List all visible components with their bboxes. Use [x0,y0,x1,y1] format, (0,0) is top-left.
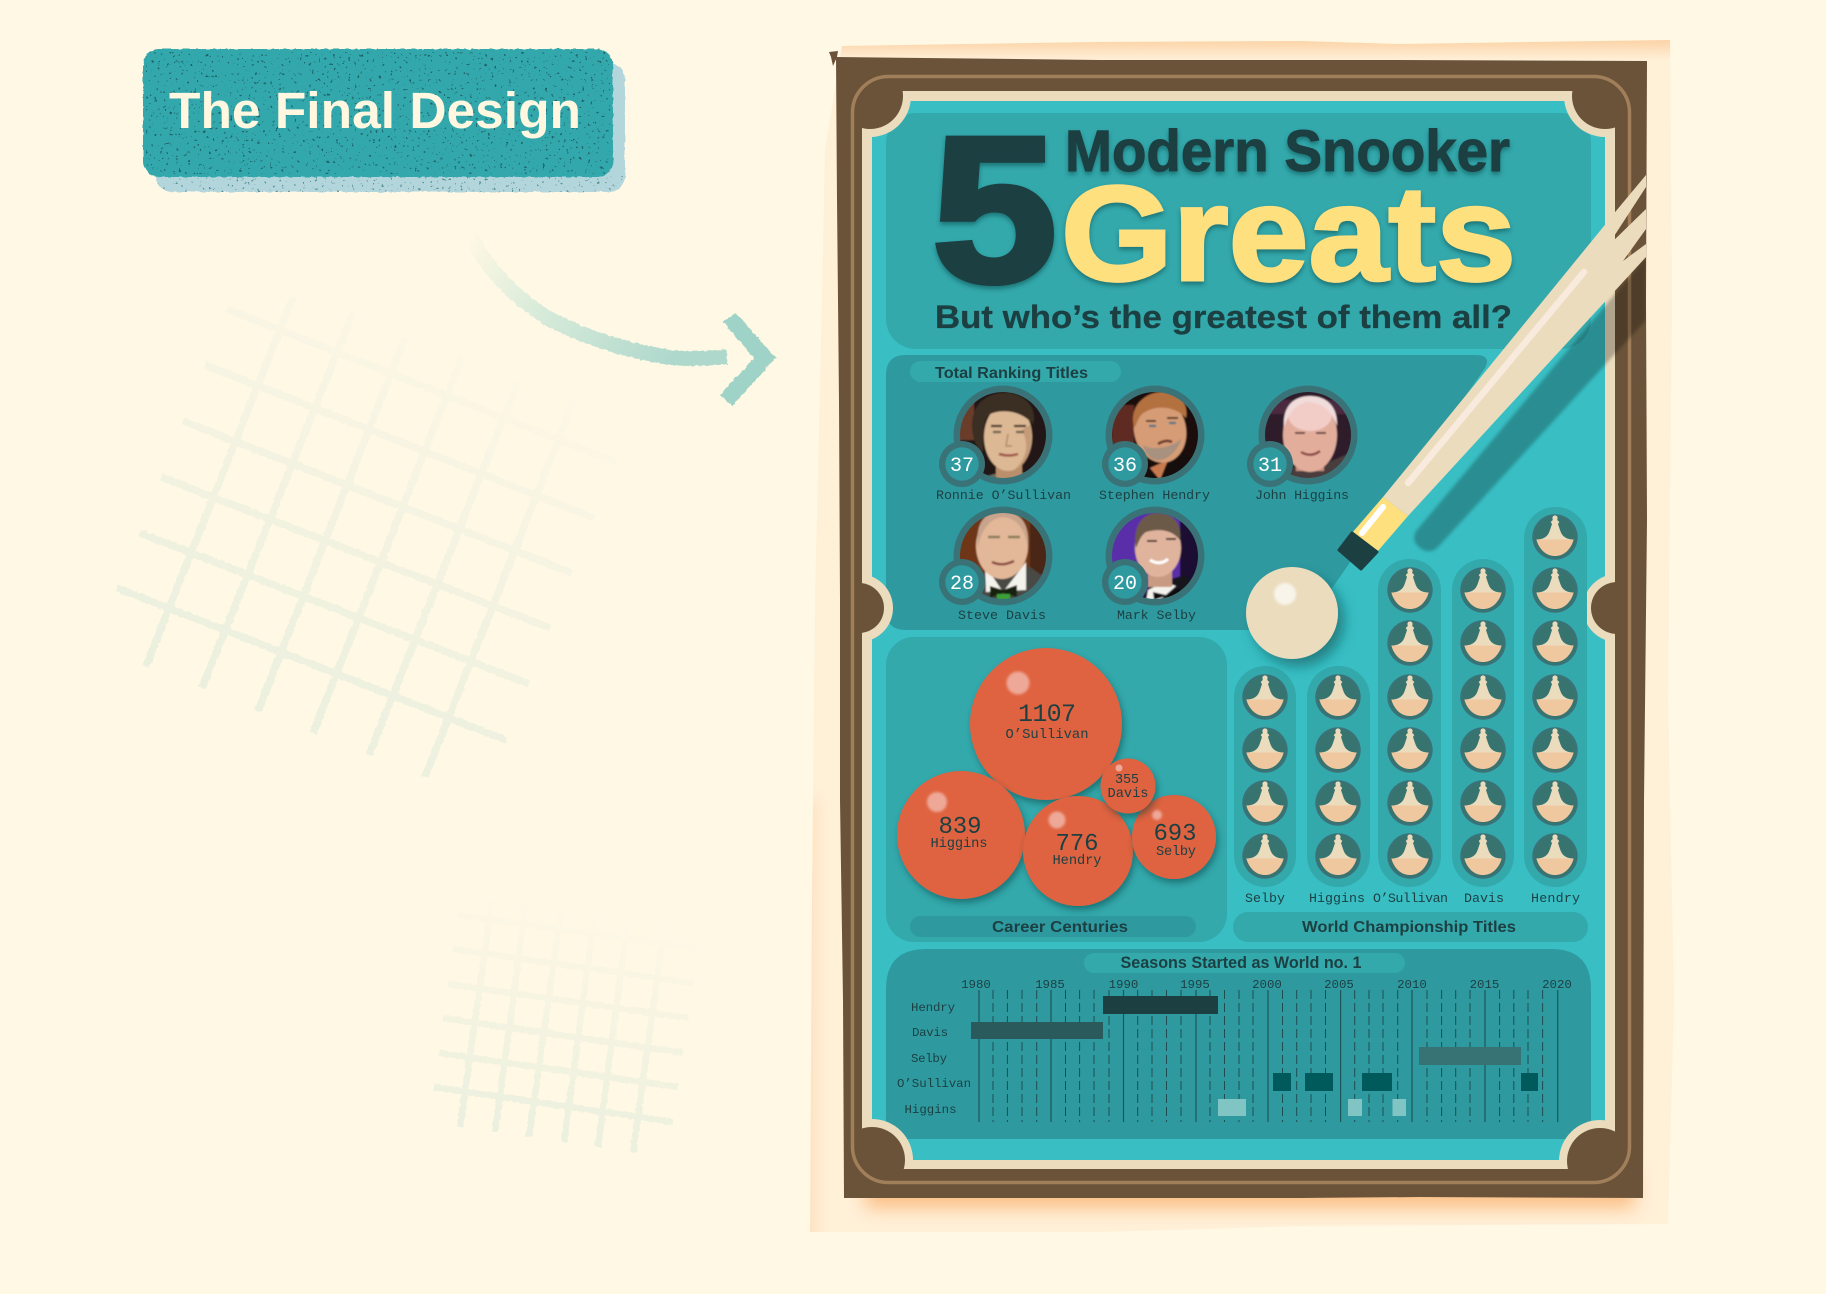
year axis labels: 1995 [1180,978,1210,992]
player axis labels: Hendry [911,1001,956,1015]
player: Stephen Hendry: 36 [1113,455,1137,478]
column: O'Sullivan 6 titles [1373,559,1448,906]
arrow pointing to the final design [457,197,776,406]
timeline heading pill: Seasons Started as World no. 1 [1120,954,1362,972]
wooden table frame [836,57,1647,1198]
player: John Higgins [1247,386,1358,503]
year axis labels: 2010 [1397,978,1427,992]
label: World Championship Titles: World Championship Titles [1302,919,1516,936]
player: Ronnie O'Sullivan: 37 [950,455,974,478]
year axis labels [961,978,1572,992]
player: Steve Davis [939,506,1052,623]
label: World Championship Titles [1233,912,1588,942]
seasons started as world number one timeline [897,953,1572,1122]
bars: Hendry [1103,996,1218,1014]
bubble: O'Sullivan 1107: 1107 [1018,700,1076,729]
year axis labels: 1980 [961,978,991,992]
year axis labels: 2005 [1324,978,1354,992]
subtitle: But who’s the greatest of them all? [935,299,1512,335]
year axis labels: 2015 [1470,978,1499,992]
column: Selby 4 titles [1234,666,1296,906]
full infographic canvas [116,40,1674,1232]
bubble: Hendry 776 [1023,796,1133,906]
bubble: Davis 355: Davis [1108,787,1148,802]
bubble: Davis 355: 355 [1115,773,1139,788]
bubble: Selby 693: 693 [1154,821,1196,848]
section heading pill [910,361,1121,382]
panel: total ranking titles background [886,355,1487,630]
panel: career centuries background [886,637,1227,942]
year axis labels: 2000 [1252,978,1282,992]
column: Higgins 4 titles: Higgins [1309,891,1365,906]
aged paper behind poster [802,38,1680,1260]
player: John Higgins: John Higgins [1255,488,1349,503]
label: Career Centuries [910,916,1196,937]
player axis labels: Higgins [904,1103,956,1117]
year axis labels: 1990 [1109,978,1138,992]
cue shadow [1414,257,1646,551]
player: Steve Davis: 28 [950,573,974,596]
column: Higgins 4 titles [1307,666,1370,906]
bubble: Hendry 776: Hendry [1052,854,1102,869]
player: Mark Selby [1102,506,1204,623]
bars: Selby [1419,1047,1521,1065]
player: Ronnie O'Sullivan: Ronnie O’Sullivan [936,488,1071,503]
player: Stephen Hendry [1099,386,1210,503]
panel: seasons as world number one background [886,949,1591,1139]
label: Career Centuries: Career Centuries [992,919,1128,936]
heading tag: The Final Design [143,49,625,192]
title: 5 Modern Snooker Greats [932,94,1516,325]
felt playing surface [872,101,1605,1160]
column: Davis 6 titles: Davis [1464,891,1504,906]
bars: Higgins [1218,1099,1406,1116]
title: 5 Modern Snooker Greats: Greats [1061,158,1516,309]
bubble: Higgins 839 [897,771,1025,899]
timeline heading pill [1084,953,1405,973]
panel: title background [886,113,1591,349]
cushion rail [862,91,1615,1169]
player axis labels: O’Sullivan [897,1077,971,1091]
bubble: O'Sullivan 1107 [970,648,1122,800]
heading tag: The Final Design: The Final Design [169,82,581,139]
title: 5 Modern Snooker Greats: 5 [932,94,1057,325]
player axis labels: Selby [911,1052,948,1066]
player: Steve Davis: Steve Davis [958,608,1046,623]
column: Selby 4 titles: Selby [1245,891,1285,906]
column: Hendry 7 titles: Hendry [1531,891,1580,906]
column: O'Sullivan 6 titles: O’Sullivan [1373,891,1448,906]
cue ball [1246,567,1338,659]
bubble: Higgins 839: Higgins [930,837,988,852]
bubble: Hendry 776: 776 [1056,831,1098,858]
career centuries bubble chart [897,648,1216,937]
table pockets [862,91,1615,1169]
total ranking titles section [910,361,1358,623]
bubble: Davis 355 [1100,758,1156,814]
bubble: Selby 693: Selby [1156,845,1196,860]
player: Stephen Hendry: Stephen Hendry [1099,488,1210,503]
player axis labels: Davis [912,1026,948,1040]
column: Hendry 7 titles [1524,507,1587,906]
world championship titles chart [1233,507,1588,942]
title: 5 Modern Snooker Greats: Modern Snooker [1065,119,1510,184]
player: Ronnie O'Sullivan [936,385,1071,503]
bubble: Selby 693 [1132,795,1216,879]
column: Davis 6 titles [1452,559,1514,906]
decorative grid upper left [117,297,616,777]
year axis labels: 1985 [1035,978,1065,992]
section heading pill: Total Ranking Titles [935,365,1088,382]
year axis labels: 2020 [1542,978,1572,992]
bars: Davis [971,1022,1103,1039]
bubble: Higgins 839: 839 [938,814,982,841]
snooker cue [1339,175,1646,569]
player: Mark Selby: Mark Selby [1117,608,1196,623]
bubble: O'Sullivan 1107: O’Sullivan [1006,727,1088,743]
player axis labels [897,1001,971,1117]
decorative grid lower [434,900,697,1152]
bars: O'Sullivan [1273,1073,1538,1091]
player: John Higgins: 31 [1258,455,1282,478]
player: Mark Selby: 20 [1113,573,1137,596]
